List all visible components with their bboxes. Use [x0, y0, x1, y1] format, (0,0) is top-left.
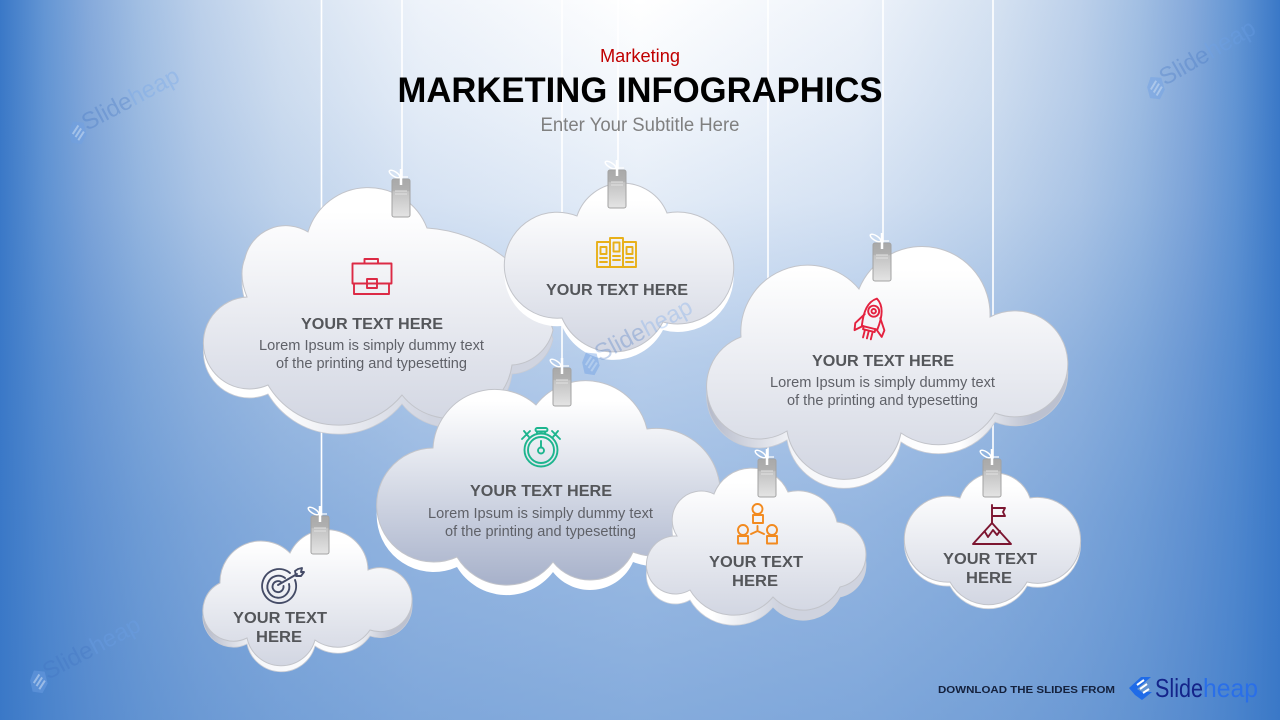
- icon: target: [262, 568, 304, 603]
- clip: [979, 449, 1001, 497]
- clip: [307, 506, 329, 554]
- heading: YOUR TEXT HERE: [301, 316, 443, 333]
- watermark: top right: Slideheap: [1154, 14, 1260, 91]
- heading: YOUR TEXT HERE: [470, 483, 612, 500]
- panel: cloud 2 books: [504, 160, 734, 360]
- title: MARKETING INFOGRAPHICS: [398, 71, 882, 110]
- heading line 2: HERE: [966, 570, 1012, 587]
- heading line 1: YOUR TEXT: [943, 551, 1037, 568]
- logo wordmark: Slide: Slide: [1155, 673, 1203, 703]
- icon: briefcase: [352, 259, 392, 294]
- panel: cloud 6 team: [646, 449, 866, 625]
- logo wordmark: heap: heap: [1203, 673, 1258, 703]
- heading line 2: HERE: [732, 573, 778, 590]
- hanging strings: [322, 0, 993, 516]
- body text: Lorem Ipsum is simply dummy text: [259, 338, 484, 354]
- panel: cloud 4 stopwatch: [377, 358, 720, 595]
- footer: download credit: [938, 673, 1258, 703]
- heading line 2: HERE: [256, 629, 302, 646]
- icon: summit flag: [973, 505, 1011, 544]
- footer label: DOWNLOAD THE SLIDES FROM: [938, 684, 1115, 696]
- panel: cloud 7 summit: [904, 449, 1081, 609]
- body text line 2: of the printing and typesetting: [276, 356, 467, 372]
- panel: cloud 1 briefcase: [203, 169, 553, 434]
- icon: books: [597, 238, 636, 267]
- icon: stopwatch: [522, 428, 560, 466]
- heading: YOUR TEXT HERE: [546, 282, 688, 299]
- heading: YOUR TEXT HERE: [812, 353, 954, 370]
- clip: [869, 233, 891, 281]
- clip: [549, 358, 571, 406]
- watermark: centre over cloud: Slideheap: [590, 293, 697, 367]
- body text: Lorem Ipsum is simply dummy text: [428, 506, 653, 522]
- icon: rocket: [852, 295, 891, 342]
- watermark: top left: Slideheap: [77, 62, 184, 136]
- body text: Lorem Ipsum is simply dummy text: [770, 375, 995, 391]
- clip: [604, 160, 626, 208]
- icon: logo mark: [1129, 677, 1152, 700]
- heading line 1: YOUR TEXT: [233, 610, 327, 627]
- subtitle: Enter Your Subtitle Here: [540, 115, 740, 136]
- body text line 2: of the printing and typesetting: [445, 524, 636, 540]
- title block: [398, 46, 882, 136]
- clip: [388, 169, 410, 217]
- panel: cloud 3 rocket: [707, 233, 1068, 488]
- watermark: bottom left: Slideheap: [38, 611, 145, 685]
- icon: team: [738, 504, 777, 544]
- heading line 1: YOUR TEXT: [709, 554, 803, 571]
- body text line 2: of the printing and typesetting: [787, 393, 978, 409]
- eyebrow: Marketing: Marketing: [600, 46, 680, 66]
- clip: [754, 449, 776, 497]
- panel: cloud 5 target: [203, 506, 412, 672]
